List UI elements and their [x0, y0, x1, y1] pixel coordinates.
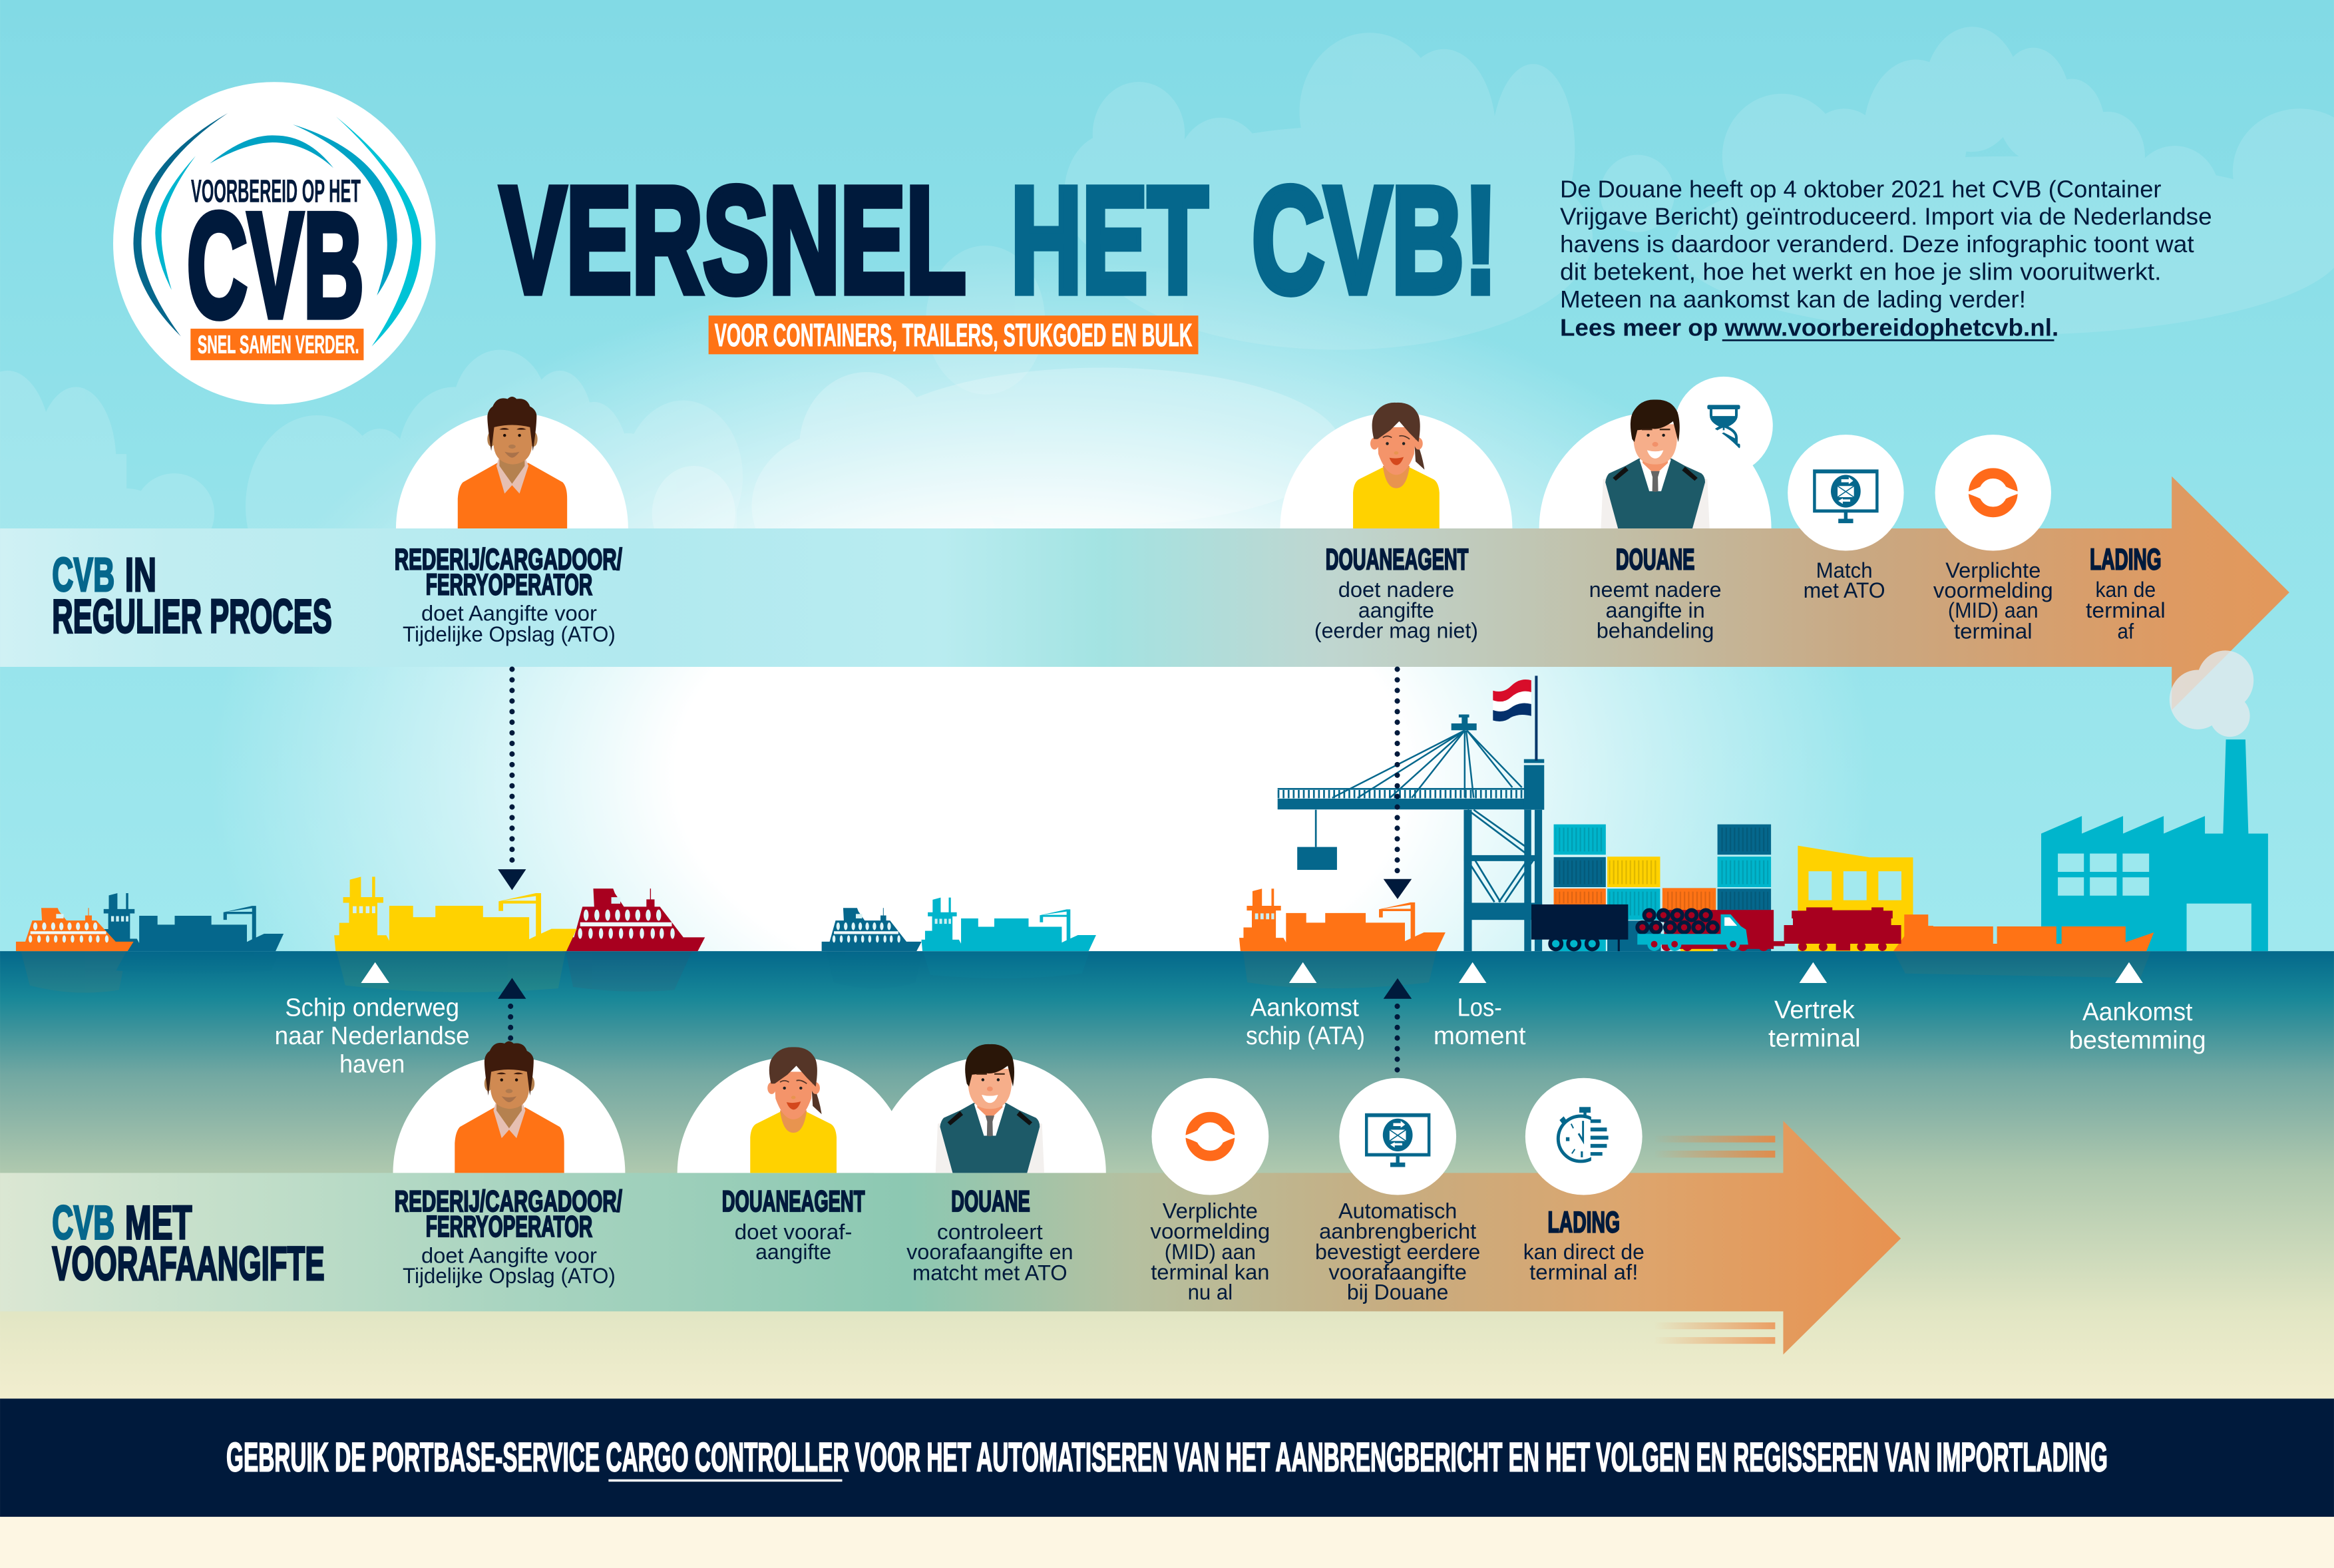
step: lading direct af: kan direct de: [1523, 1239, 1645, 1264]
actor: douaneagent regulier: DOUANEAGENT: [1326, 543, 1468, 576]
intro text block: Lees meer op www.voorbereidophetcvb.nl.: [1560, 314, 2058, 341]
subtitle ribbon: [709, 315, 1198, 354]
step: lading direct af: LADING: [1548, 1206, 1620, 1239]
actor: rederij regulier: [395, 397, 628, 646]
actor: douane regulier: [1539, 399, 1772, 642]
hazy clouds: [652, 367, 1341, 582]
red truck: [1662, 910, 1785, 951]
up arrow: rederij: [498, 978, 526, 1042]
step: match met ATO: Match: [1816, 558, 1873, 582]
ship reflections: [21, 951, 2151, 993]
up arrow: automatisch aanbrengbericht: [1384, 978, 1412, 1075]
step: automatisch aanbrengbericht: aanbrengbericht: [1319, 1219, 1476, 1243]
dotted arrow: ATO naar schip onderweg: [498, 670, 526, 890]
step: verplichte voormelding vooraf: Verplichte: [1163, 1199, 1258, 1223]
actor: douane regulier: DOUANE: [1616, 543, 1694, 576]
title: HET: [1011, 156, 1208, 325]
process arrow: voorafaangifte: [0, 1121, 1901, 1354]
actor: rederij regulier: Tijdelijke Opslag (ATO): [403, 622, 616, 646]
actor: rederij voorafaangifte: REDERIJ/CARGADOOR/: [395, 1185, 622, 1218]
intro text block: dit betekent, hoe het werkt en hoe je slim vooruitwerkt.: [1560, 258, 2162, 285]
milestone: vertrek terminal: Vertrek: [1774, 996, 1855, 1024]
label: CVB met voorafaangifte: CVB: [52, 1197, 114, 1250]
passenger ship: teal: [822, 908, 922, 951]
cargo ship: light teal: [921, 898, 1096, 951]
red tanker: [1784, 907, 1901, 951]
flag: [1493, 676, 1537, 761]
milestone: schip onderweg: [275, 962, 470, 1078]
containers: [1554, 825, 1771, 951]
step: verplichte voormelding vooraf: [1150, 1078, 1270, 1304]
actor: douaneagent regulier: doet nadere: [1338, 577, 1454, 602]
clouds: [0, 350, 743, 597]
flatbed truck with pipes: [1637, 910, 1748, 949]
step: automatisch aanbrengbericht: bij Douane: [1347, 1280, 1448, 1304]
label: CVB in regulier proces: CVB: [52, 548, 114, 602]
intro text block: havens is daardoor veranderd. Deze infographic toont wat: [1560, 231, 2194, 258]
container ribs: [1555, 828, 1768, 915]
actor: douaneagent voorafaangifte: doet vooraf-: [735, 1219, 852, 1244]
crane: [1278, 715, 1544, 951]
actor: douaneagent regulier: [1280, 403, 1512, 642]
intro text block: Meteen na aankomst kan de lading verder!: [1560, 286, 2026, 313]
logo: VOORBEREID OP HET: [191, 173, 361, 209]
subtitle ribbon: VOOR CONTAINERS, TRAILERS, STUKGOED EN BULK: [715, 317, 1193, 353]
step: verplichte voormelding: terminal: [1954, 618, 2033, 643]
white haze glow: [0, 253, 2334, 952]
step: lading af: [2086, 543, 2166, 643]
logo: SNEL SAMEN VERDER.: [198, 331, 359, 359]
label: CVB in regulier proces: IN: [125, 548, 156, 602]
actor: douane regulier: aangifte in: [1606, 598, 1705, 622]
actor: douaneagent voorafaangifte: DOUANEAGENT: [722, 1185, 865, 1218]
actor: douane voorafaangifte: DOUANE: [951, 1185, 1030, 1218]
cargo ship: orange: [1239, 888, 1446, 951]
step: verplichte voormelding: Verplichte: [1945, 558, 2041, 582]
step: automatisch aanbrengbericht: [1315, 1078, 1480, 1304]
cargo ship: yellow: [334, 877, 577, 951]
step: lading af: af: [2118, 618, 2134, 643]
actor: rederij voorafaangifte: doet Aangifte voor: [421, 1243, 597, 1268]
step: automatisch aanbrengbericht: bevestigt eerdere: [1315, 1239, 1480, 1264]
step: lading af: terminal: [2086, 598, 2166, 622]
logo: [113, 82, 435, 405]
actor: douaneagent voorafaangifte: [678, 1047, 910, 1264]
actor: douaneagent voorafaangifte: aangifte: [755, 1239, 831, 1264]
milestone: schip onderweg: Schip onderweg: [285, 994, 459, 1022]
icon: stopwatch: [1558, 1107, 1612, 1165]
label: CVB met voorafaangifte: MET: [125, 1197, 192, 1250]
sky background: [0, 0, 2334, 952]
step: match met ATO: [1788, 435, 1904, 602]
actor: rederij regulier: FERRYOPERATOR: [426, 568, 592, 601]
step: automatisch aanbrengbericht: voorafaangifte: [1328, 1259, 1467, 1284]
milestone: vertrek terminal: terminal: [1768, 1024, 1861, 1052]
navy truck: [1531, 904, 1628, 951]
actor: rederij voorafaangifte: Tijdelijke Opslag (ATO): [403, 1263, 616, 1288]
milestone: aankomst bestemming: bestemming: [2069, 1027, 2206, 1055]
milestone: aankomst bestemming: Aankomst: [2082, 998, 2193, 1026]
title: CVB!: [1252, 156, 1497, 325]
actor: douane regulier: behandeling: [1597, 618, 1714, 642]
milestone: los-moment: Los-: [1458, 994, 1502, 1022]
label: CVB met voorafaangifte: [52, 1197, 325, 1290]
passenger ship: red: [562, 888, 705, 951]
label: CVB in regulier proces: [52, 548, 332, 644]
sea and lower background: [0, 951, 2334, 1399]
step: verplichte voormelding: [1933, 435, 2053, 643]
factory: [2041, 739, 2268, 951]
step: lading af: kan de: [2095, 577, 2156, 602]
upper clouds: [926, 27, 2334, 395]
milestone: los-moment: moment: [1434, 1022, 1526, 1050]
step: lading af: LADING: [2090, 543, 2162, 576]
milestone: aankomst schip: schip (ATA): [1246, 1022, 1365, 1050]
milestone: schip onderweg: haven: [339, 1050, 405, 1078]
intro text block: [1560, 176, 2212, 341]
logo: CVB: [187, 183, 364, 349]
intro text block: Vrijgave Bericht) geïntroduceerd. Import via de Nederlandse: [1560, 204, 2212, 230]
cargo ship: dark teal: [97, 893, 284, 951]
milestone: aankomst bestemming: [2069, 962, 2206, 1055]
milestone: schip onderweg: naar Nederlandse: [275, 1022, 470, 1050]
actor: douaneagent regulier: aangifte: [1358, 598, 1434, 622]
orange barge: [1869, 914, 2154, 951]
intro text block: De Douane heeft op 4 oktober 2021 het CVB (Container: [1560, 176, 2162, 202]
speed lines: [1654, 1136, 1775, 1344]
dotted arrow: douaneagent naar schip: [1384, 670, 1412, 899]
actor: rederij regulier: REDERIJ/CARGADOOR/: [395, 543, 622, 576]
footer banner: [0, 1398, 2334, 1517]
label: CVB met voorafaangifte: VOORAFAANGIFTE: [52, 1237, 325, 1290]
milestone: los-moment: [1434, 962, 1526, 1050]
actor: douane voorafaangifte: controleert: [937, 1219, 1043, 1244]
actor: douaneagent regulier: (eerder mag niet): [1314, 618, 1478, 642]
step: verplichte voormelding vooraf: nu al: [1188, 1280, 1233, 1304]
step: verplichte voormelding vooraf: (MID) aan: [1165, 1239, 1256, 1264]
actor: douane regulier: neemt nadere: [1589, 577, 1722, 602]
milestone: vertrek terminal: [1768, 962, 1861, 1052]
step: lading direct af: [1523, 1078, 1645, 1284]
milestone: aankomst schip: Aankomst: [1251, 994, 1359, 1022]
title: VERSNEL: [500, 156, 966, 325]
smoke: [2170, 650, 2253, 737]
label: CVB in regulier proces: REGULIER PROCES: [52, 590, 332, 644]
actor: rederij voorafaangifte: [393, 1041, 625, 1288]
icon: hourglass: [1674, 377, 1773, 475]
step: automatisch aanbrengbericht: Automatisch: [1338, 1199, 1457, 1223]
step: verplichte voormelding vooraf: terminal kan: [1151, 1259, 1269, 1284]
milestone: aankomst schip: [1246, 962, 1365, 1050]
logo arcs: [133, 113, 421, 346]
actor: douane voorafaangifte: voorafaangifte en: [906, 1239, 1073, 1264]
step: verplichte voormelding: (MID) aan: [1948, 598, 2039, 622]
passenger ship: orange: [16, 908, 134, 951]
step: lading direct af: terminal af!: [1529, 1259, 1638, 1284]
actor: douane voorafaangifte: [874, 1044, 1106, 1284]
step: verplichte voormelding vooraf: voormelding: [1150, 1219, 1270, 1243]
actor: rederij voorafaangifte: FERRYOPERATOR: [426, 1211, 592, 1243]
step: verplichte voormelding: voormelding: [1933, 578, 2053, 602]
yellow building: [1798, 846, 1913, 951]
step: match met ATO: met ATO: [1804, 578, 1885, 602]
actor: douane voorafaangifte: matcht met ATO: [912, 1260, 1068, 1284]
background bottom band: [0, 1517, 2334, 1568]
process arrow: regulier proces: [0, 477, 2289, 710]
actor: rederij regulier: doet Aangifte voor: [421, 601, 597, 626]
